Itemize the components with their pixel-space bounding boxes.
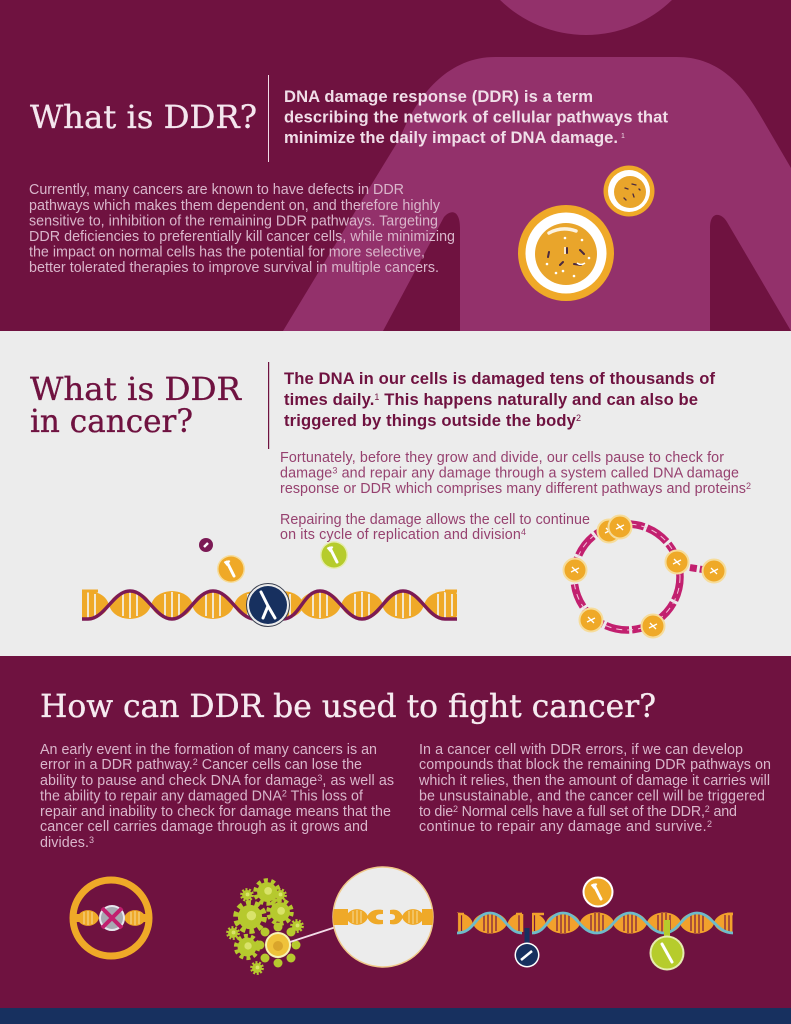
body text right column: continue to repair any damage and survive. [419, 819, 707, 835]
icon: navy repair tool [246, 584, 290, 626]
illustration: DNA with repair tools [457, 876, 733, 970]
body text right column: to die [419, 804, 453, 820]
body text right column: In a cancer cell with DDR errors, if we can develop [419, 742, 743, 758]
body text [29, 182, 455, 276]
body text: pathways which makes them dependent on, and therefore highly [29, 198, 441, 214]
icon: lime repair tool [320, 541, 348, 569]
body text right column: and [710, 804, 737, 820]
heading: What is DDR? [30, 98, 257, 136]
body text left column: , as well as [322, 773, 394, 789]
icon: gold repair tool [217, 555, 245, 583]
body text: Fortunately, before they grow and divide, our cells pause to check for [280, 450, 724, 466]
icon: large cell [518, 205, 614, 301]
footer band [0, 1008, 791, 1024]
body text: on its cycle of replication and division [280, 527, 521, 543]
body text left column: cancer cell carries damage through as it grows and [40, 819, 368, 835]
lead statement: triggered by things outside the body [284, 411, 576, 430]
body text left column: 3 [89, 835, 94, 845]
lead statement: describing the network of cellular pathways that [284, 108, 668, 126]
body text left column [40, 742, 394, 851]
body text left column: repair and inability to check for damage means that the [40, 804, 391, 820]
body text left column: An early event in the formation of many cancers is an [40, 742, 377, 758]
body text: 4 [521, 527, 526, 537]
lead statement: minimize the daily impact of DNA damage. [284, 128, 618, 147]
lead statement: DNA damage response (DDR) is a term [284, 87, 593, 106]
lead statement: 1 [374, 392, 379, 402]
body text left column: 2 [282, 788, 287, 798]
body text right column: 2 [453, 804, 458, 814]
body text: DDR deficiencies to preferentially kill cancer cells, while minimizing [29, 229, 455, 245]
body text right column: 2 [705, 804, 710, 814]
diagram: cell cycle ring [564, 516, 726, 638]
body text: 3 [332, 466, 337, 476]
lead statement: 2 [576, 413, 581, 423]
panel: how can DDR be used to fight cancer [40, 692, 770, 975]
body text left column: Cancer cells can lose the [198, 757, 362, 773]
body text: sensitive to, inhibition of the remaining DDR pathways. Targeting [29, 214, 438, 230]
body text left column: This loss of [287, 788, 363, 804]
body text right column: be unsustainable, and the cancer cell will be triggered [419, 788, 765, 804]
illustration: cancer cell cluster [228, 881, 302, 974]
divider line [268, 75, 269, 162]
body text left column: error in a DDR pathway. [40, 757, 193, 773]
body text: 2 [746, 481, 751, 491]
body text right column: compounds that block the remaining DDR pathways on [419, 757, 771, 773]
icon: orange repair tool [582, 876, 614, 908]
illustration: human silhouette [283, 0, 791, 331]
callout: magnified broken DNA [290, 867, 433, 967]
heading: in cancer? [30, 402, 193, 440]
body text left column: 2 [193, 757, 198, 767]
icon: maroon repair tool [199, 538, 213, 552]
icon: small cell [604, 166, 654, 216]
lead statement: The DNA in our cells is damaged tens of thousands of [284, 369, 715, 388]
icon: lime repair tool [650, 920, 684, 970]
body text right column [418, 742, 771, 835]
lead statement [284, 87, 668, 147]
body text: the impact on normal cells has the potential for more selective, [29, 244, 425, 260]
lead statement: This happens naturally and can also be [380, 390, 698, 409]
lead statement: times daily. [284, 390, 374, 409]
heading: How can DDR be used to fight cancer? [40, 687, 656, 725]
body text: response or DDR which comprises many different pathways and proteins [280, 481, 746, 497]
body text: Currently, many cancers are known to have defects in DDR [29, 182, 404, 198]
panel: what is DDR [0, 0, 791, 331]
body text left column: 3 [317, 773, 322, 783]
body text: damage [280, 466, 332, 482]
body text right column: 2 [707, 819, 712, 829]
body text: better tolerated therapies to improve survival in multiple cancers. [29, 260, 439, 276]
body text [280, 450, 751, 543]
body text right column: which it relies, then the amount of damage it carries will [418, 773, 770, 789]
illustration: DNA strand with repair tools [67, 538, 466, 626]
illustration: DNA with blocked repair in ring [73, 880, 150, 956]
lead statement [284, 369, 715, 430]
body text: and repair any damage through a system called DNA damage [337, 466, 739, 482]
heading: What is DDR [30, 370, 242, 408]
heading [30, 370, 242, 440]
body text left column: ability to pause and check DNA for damage [40, 773, 317, 789]
body text: Repairing the damage allows the cell to continue [280, 512, 590, 528]
icon: navy repair tool [514, 928, 540, 968]
body text right column: Normal cells have a full set of the DDR, [458, 804, 705, 820]
divider line [268, 362, 269, 449]
panel: what is DDR in cancer [0, 331, 791, 656]
body text left column: divides. [40, 835, 89, 851]
lead statement: 1 [621, 133, 625, 140]
body text left column: the ability to repair any damaged DNA [40, 788, 282, 804]
